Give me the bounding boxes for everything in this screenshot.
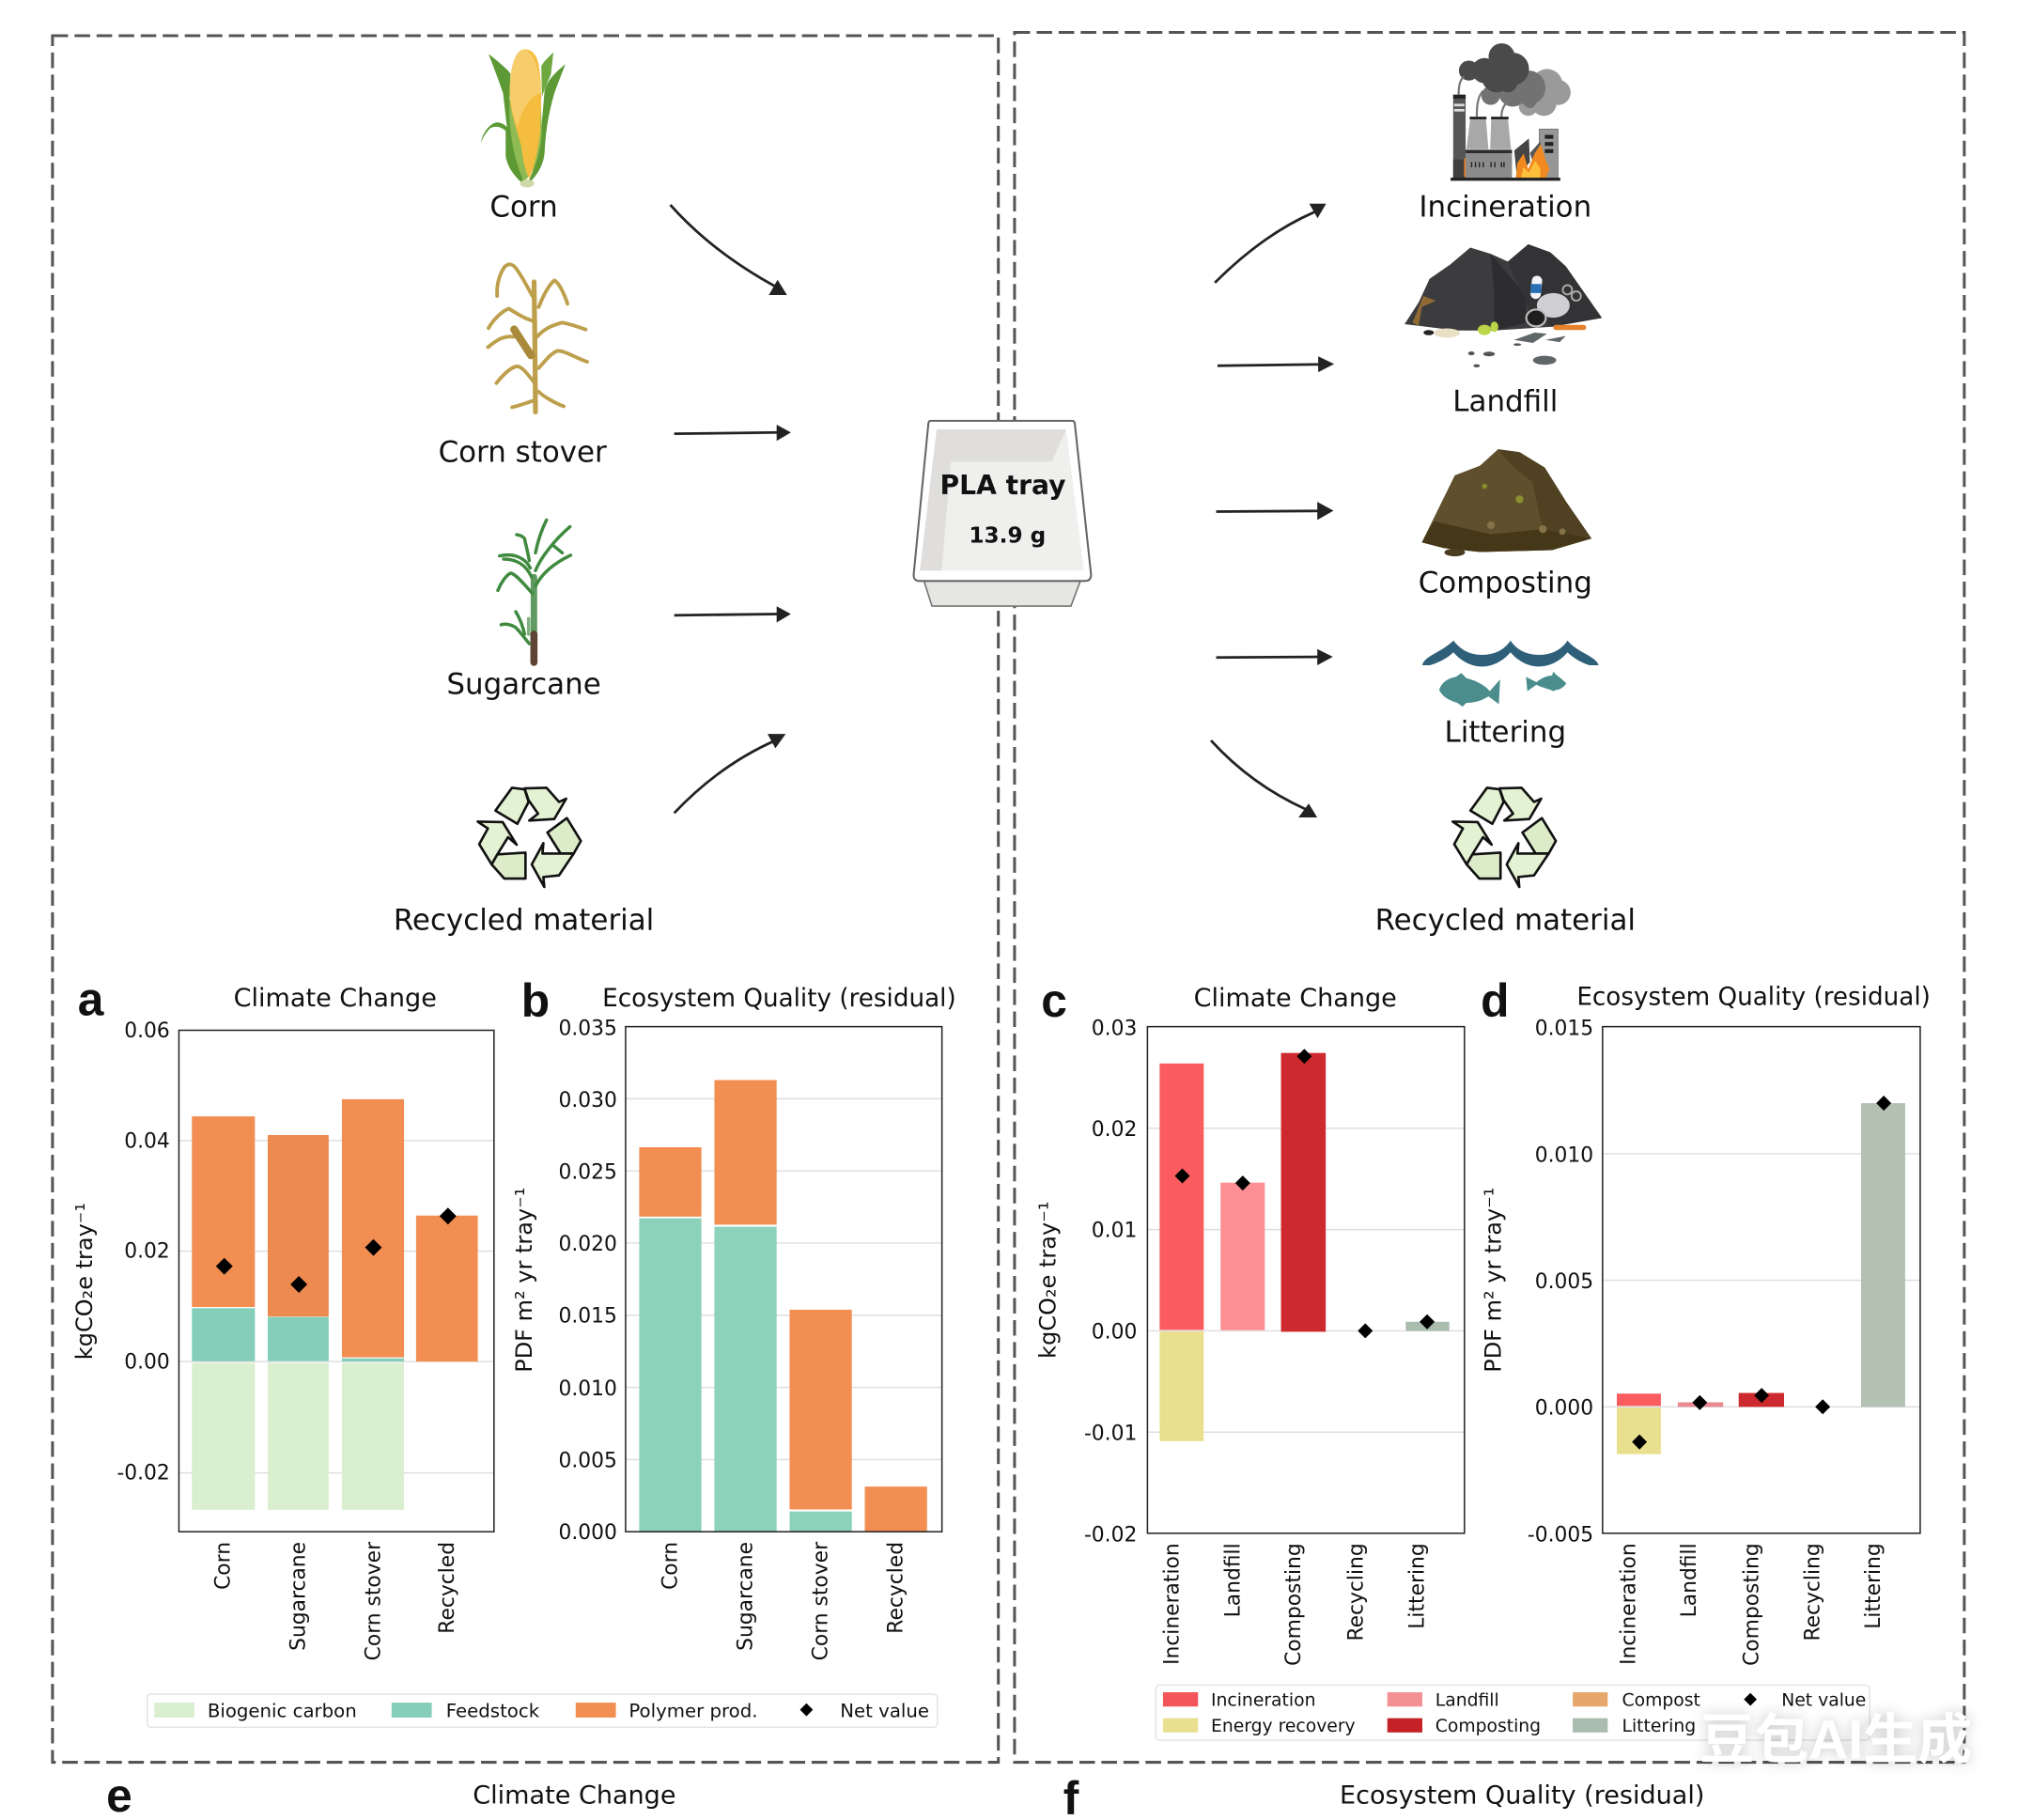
legend: panels c and d: Composting — [1436, 1717, 1541, 1736]
section title e: Climate Change — [473, 1781, 676, 1811]
icon: landfill heap — [1404, 244, 1602, 367]
y tick labels c — [1084, 1017, 1137, 1547]
label: Recycled material, end-of-life: Recycled material — [1375, 904, 1636, 938]
y tick labels c: 0.00 — [1092, 1320, 1137, 1344]
arrow: recycled material to tray — [675, 734, 785, 813]
arrow: tray to littering — [1217, 649, 1333, 665]
x tick labels b: Corn stover — [810, 1542, 833, 1660]
x tick labels a — [211, 1542, 459, 1660]
panel letter d: d — [1481, 974, 1509, 1027]
y tick labels a: 0.00 — [124, 1351, 170, 1375]
label: Landfill: Landfill — [1452, 385, 1558, 419]
section title f: Ecosystem Quality (residual) — [1340, 1781, 1704, 1811]
net value markers d — [1632, 1096, 1891, 1450]
y tick labels b: 0.010 — [559, 1377, 617, 1401]
x tick labels b — [659, 1542, 908, 1660]
x tick labels a: Sugarcane — [287, 1542, 310, 1651]
x tick labels a: Corn stover — [362, 1542, 385, 1660]
chart title b: Ecosystem Quality (residual) — [602, 985, 956, 1013]
label: PLA tray: PLA tray — [940, 470, 1065, 501]
x tick labels b: Corn — [659, 1542, 682, 1590]
icon: water waves and fish — [1422, 641, 1599, 707]
label: Corn stover: Corn stover — [439, 435, 607, 469]
icon: PLA tray with mass — [914, 421, 1091, 606]
y tick labels d: 0.010 — [1535, 1144, 1593, 1168]
legend: panels a and b: Polymer prod. — [629, 1700, 758, 1721]
icon: corn stover — [488, 264, 587, 412]
legend: panels c and d: Energy recovery — [1211, 1717, 1356, 1736]
x tick labels d: Littering — [1862, 1543, 1886, 1629]
panel letter b: b — [521, 974, 550, 1027]
legend: panels c and d: Landfill — [1436, 1691, 1499, 1711]
y tick labels a: -0.02 — [116, 1462, 170, 1486]
y tick labels b: 0.000 — [559, 1521, 617, 1545]
panel b: ecosystem quality feedstock chart — [511, 974, 956, 1660]
y tick labels c: 0.02 — [1092, 1118, 1137, 1142]
label: Incineration: Incineration — [1419, 190, 1591, 224]
arrow: tray to recycled material — [1211, 740, 1317, 817]
x tick labels d: Landfill — [1678, 1543, 1701, 1617]
x tick labels d — [1617, 1543, 1886, 1666]
x tick labels b: Recycled — [885, 1542, 908, 1634]
y tick labels d: 0.015 — [1535, 1017, 1593, 1040]
y tick labels d: 0.005 — [1535, 1270, 1593, 1294]
x tick labels d: Recycling — [1801, 1543, 1824, 1641]
icon: corn — [481, 49, 566, 187]
arrow: corn to tray — [671, 205, 787, 295]
y tick labels b: 0.015 — [559, 1305, 617, 1329]
x tick labels b: Sugarcane — [734, 1542, 757, 1651]
x tick labels c: Littering — [1405, 1543, 1429, 1629]
x tick labels d: Composting — [1740, 1543, 1763, 1666]
axis label b: PDF m² yr tray⁻¹ — [511, 1188, 537, 1373]
y tick labels c: -0.02 — [1084, 1523, 1137, 1547]
x tick labels c: Incineration — [1161, 1543, 1185, 1665]
panel d: ecosystem quality end-of-life chart — [1480, 974, 1931, 1666]
legend: panels a and b — [147, 1694, 938, 1727]
icon: recycling symbol, end-of-life — [1452, 787, 1556, 887]
legend: panels c and d — [1156, 1685, 1870, 1740]
axis label c: kgCO₂e tray⁻¹ — [1034, 1202, 1061, 1359]
arrow: tray to incineration — [1215, 204, 1327, 283]
y tick labels a: 0.04 — [124, 1129, 170, 1153]
x tick labels a: Corn — [211, 1542, 235, 1590]
icon: recycling symbol, feedstock — [477, 787, 581, 887]
y tick labels d: -0.005 — [1528, 1523, 1593, 1547]
panel letter c: c — [1041, 974, 1067, 1027]
arrow: tray to landfill — [1218, 356, 1334, 372]
y tick labels d — [1528, 1017, 1593, 1547]
panel: end-of-life dashed frame — [1015, 33, 1964, 1763]
icon: compost heap — [1421, 449, 1591, 556]
legend: panels a and b: Net value — [840, 1700, 929, 1721]
y tick labels a — [116, 1019, 170, 1486]
chart title d: Ecosystem Quality (residual) — [1576, 984, 1931, 1012]
chart title a: Climate Change — [234, 984, 437, 1013]
x tick labels d: Incineration — [1617, 1543, 1640, 1665]
label: Composting: Composting — [1419, 567, 1592, 600]
arrow: corn stover to tray — [675, 425, 791, 441]
label: Littering: Littering — [1445, 715, 1566, 749]
stacked bars b — [639, 1081, 927, 1532]
panel c: climate change end-of-life chart — [1034, 974, 1465, 1666]
bars c — [1159, 1053, 1450, 1441]
y tick labels b: 0.025 — [559, 1161, 617, 1185]
axis label d: PDF m² yr tray⁻¹ — [1480, 1188, 1506, 1373]
y tick labels b — [559, 1017, 617, 1545]
icon: sugarcane — [498, 520, 570, 662]
legend: panels c and d: Net value — [1781, 1691, 1866, 1711]
label: tray mass: 13.9 g — [969, 523, 1046, 549]
watermark: 豆包AI生成 — [1699, 1710, 1972, 1770]
legend: panels c and d: Incineration — [1211, 1691, 1315, 1711]
y tick labels b: 0.020 — [559, 1233, 617, 1256]
legend: panels c and d: Compost — [1622, 1691, 1700, 1711]
chart title c: Climate Change — [1194, 984, 1397, 1013]
arrow: sugarcane to tray — [675, 606, 791, 622]
x tick labels a: Recycled — [436, 1542, 459, 1634]
y tick labels b: 0.030 — [559, 1089, 617, 1112]
net value markers a — [216, 1207, 457, 1293]
bars d — [1617, 1103, 1905, 1454]
y tick labels c: 0.03 — [1092, 1017, 1137, 1040]
legend: panels a and b: Biogenic carbon — [208, 1700, 357, 1721]
x tick labels c: Composting — [1282, 1543, 1306, 1666]
panel a: climate change feedstock chart — [71, 973, 494, 1660]
x tick labels c: Landfill — [1221, 1543, 1245, 1617]
label: Corn: Corn — [489, 190, 558, 224]
y tick labels b: 0.005 — [559, 1450, 617, 1473]
icon: incineration plant — [1451, 43, 1571, 180]
y tick labels c: -0.01 — [1084, 1423, 1137, 1446]
label: Recycled material, feedstock: Recycled material — [394, 904, 654, 938]
panel: upstream feedstock dashed frame — [53, 36, 999, 1763]
legend: panels a and b: Feedstock — [446, 1700, 540, 1721]
legend: panels c and d: Littering — [1622, 1717, 1696, 1736]
y tick labels b: 0.035 — [559, 1017, 617, 1040]
y tick labels c: 0.01 — [1092, 1220, 1137, 1243]
net value markers c — [1175, 1049, 1435, 1338]
axis label a: kgCO₂e tray⁻¹ — [71, 1203, 98, 1360]
x tick labels c — [1161, 1543, 1429, 1666]
y tick labels d: 0.000 — [1535, 1397, 1593, 1421]
stacked bars a — [192, 1099, 478, 1510]
label: Sugarcane: Sugarcane — [446, 667, 601, 701]
y tick labels a: 0.02 — [124, 1240, 170, 1264]
y tick labels a: 0.06 — [124, 1019, 170, 1043]
x tick labels c: Recycling — [1344, 1543, 1368, 1641]
panel letter a: a — [78, 973, 104, 1026]
arrow: tray to composting — [1217, 502, 1333, 520]
